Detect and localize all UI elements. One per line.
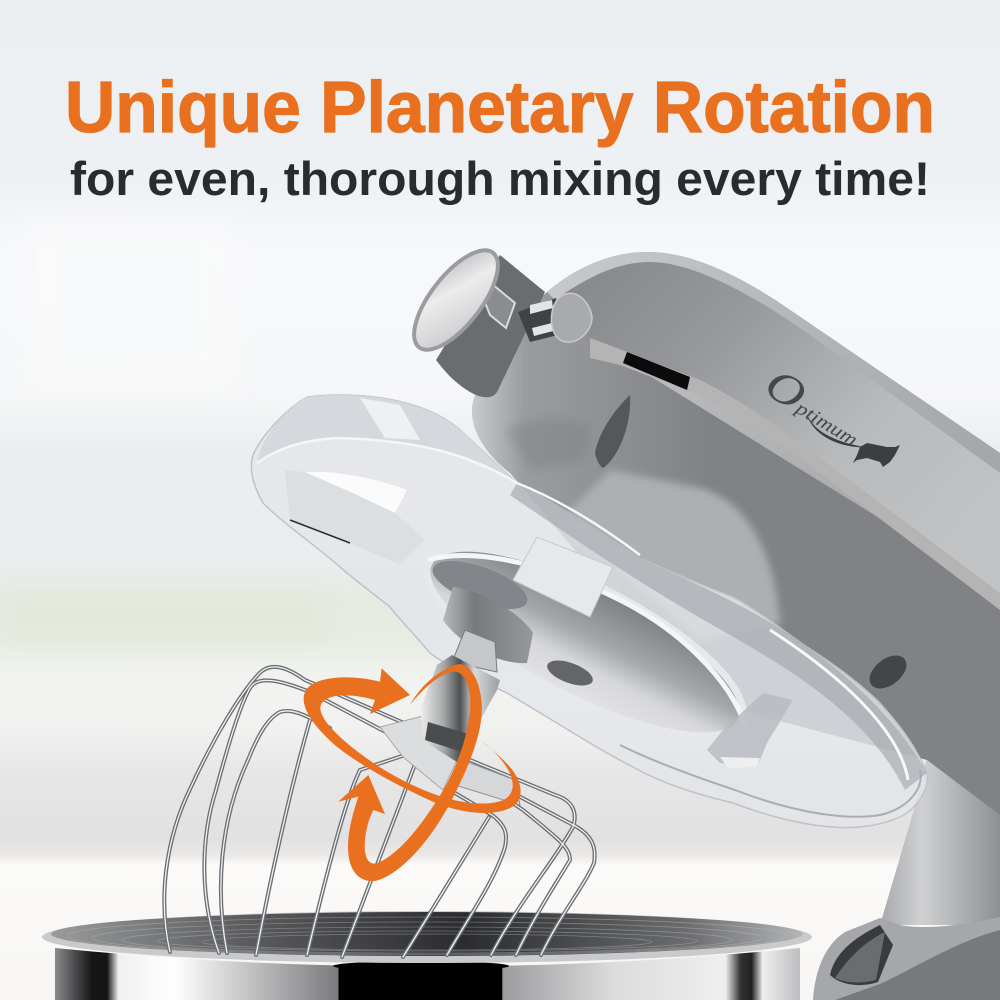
lid inner contour: [257, 438, 640, 555]
chrome trim strip: [590, 338, 1000, 610]
bowl interior: [51, 912, 803, 956]
lid right inner highlight: [770, 630, 908, 780]
bowl black reflection: [333, 961, 509, 971]
mixer base: [813, 917, 1000, 1000]
lid centre opening: [404, 513, 766, 771]
logo swoosh: [808, 417, 862, 447]
head vent slot: [595, 395, 630, 468]
bowl rim: [42, 911, 812, 963]
lid top rim tinted band: [510, 483, 927, 790]
whisk wire highlights: [164, 667, 595, 957]
mixer stand neck: [880, 757, 1000, 925]
opening bright arc: [428, 556, 745, 725]
lid rim reflection: [360, 398, 420, 440]
lid right tab: [707, 693, 793, 767]
drive hub: [427, 551, 596, 691]
lid right rim line: [620, 745, 921, 817]
lid back rim panel: [257, 395, 517, 483]
lid outer shell: [251, 395, 927, 828]
connector dark band: [425, 722, 472, 752]
knob stem: [518, 298, 562, 342]
connector plate: [380, 715, 457, 790]
black trim segment: [623, 352, 690, 390]
connector body: [420, 655, 500, 762]
base opening wedge: [835, 932, 885, 982]
stem highlights: [530, 300, 557, 336]
spring shaft: [452, 630, 497, 672]
bowl interior brushed lines: [67, 917, 787, 955]
stainless steel bowl: [42, 911, 812, 1000]
lid right tab foot: [720, 757, 760, 768]
dome reflection: [505, 419, 590, 470]
brand logo: [757, 359, 900, 467]
lid clip: [513, 537, 613, 617]
base opening: [830, 925, 893, 985]
head dark body shell: [472, 252, 1000, 815]
vertical rotation arrow: [338, 664, 482, 881]
locking knob: [551, 293, 592, 342]
subtitle: for even, thorough mixing every time!: [70, 152, 930, 205]
hub disc: [443, 587, 533, 663]
orange rotation arrows: [304, 664, 521, 881]
hub hole: [544, 655, 596, 691]
lower dome highlight: [560, 470, 780, 640]
whisk wires: [164, 667, 595, 957]
horizontal rotation arrow: [304, 668, 521, 813]
lid slot cut-out: [305, 472, 407, 513]
base body: [813, 917, 1000, 1000]
hub collar: [427, 551, 533, 619]
rear vent hole: [863, 649, 913, 695]
transparent splash guard lid: [251, 395, 927, 828]
lid black edge line: [290, 520, 350, 543]
head top rim: [547, 252, 1000, 593]
whisk attachment: [164, 667, 595, 957]
chrome end cap and knob: [399, 237, 592, 397]
attachment hub cap: [399, 237, 513, 363]
bowl exterior wall: [55, 948, 800, 1000]
title: Unique Planetary Rotation: [65, 68, 935, 148]
base lower shell: [835, 930, 1000, 1000]
attachment hub housing: [436, 255, 545, 397]
housing chrome band: [484, 284, 515, 328]
mixer head: [472, 252, 1000, 815]
lid rear inner panel: [285, 470, 425, 565]
icon: kangaroo: [853, 443, 900, 467]
whisk chrome connector: [380, 655, 520, 805]
head upper panel: [555, 262, 1000, 593]
brand name: Optimum: [757, 359, 873, 455]
connector crossbar: [455, 760, 520, 805]
